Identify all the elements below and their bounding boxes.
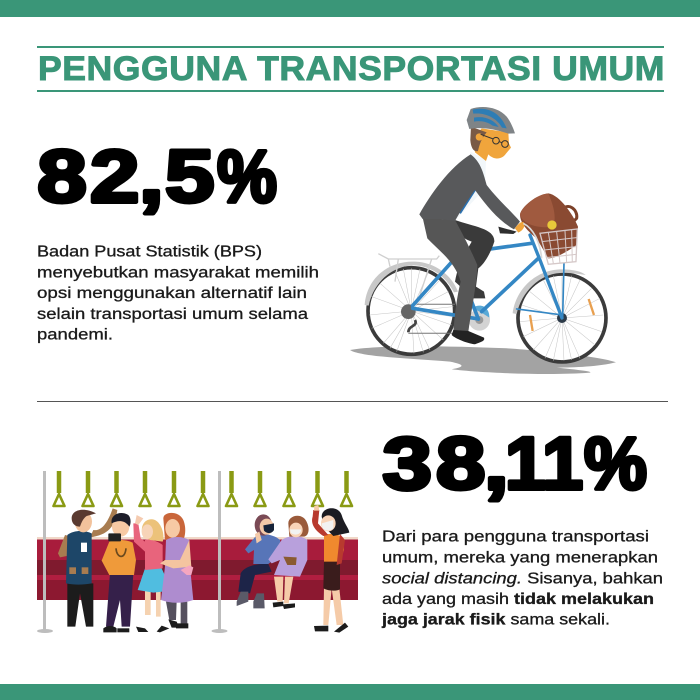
illustration: train passengers	[37, 471, 358, 633]
statistic: 82,5%: 82,5	[37, 136, 214, 218]
text block: BPS: Badan Pusat Statistik (BPS)	[37, 244, 262, 260]
statistic: 38,11%: 38,	[383, 423, 509, 505]
man with orange shirt	[102, 513, 136, 632]
shadow	[350, 346, 616, 374]
text block: social distancing: ada yang masih tidak melakukan	[382, 591, 654, 608]
poles	[37, 471, 228, 633]
text block: BPS: selain transportasi umum selama	[37, 306, 308, 323]
cyclist head	[470, 127, 511, 161]
text block: social distancing: Dari para pengguna transportasi	[382, 529, 649, 546]
text block: social distancing	[381, 529, 663, 628]
cyclist jacket	[419, 154, 520, 229]
statistic: 82,5%: %	[217, 135, 277, 218]
cyclist front leg and shoe	[423, 218, 484, 344]
text block: social distancing: umum, mereka yang menerapkan	[382, 550, 658, 566]
text block: social distancing: social distancing. Sisanya, bahkan	[382, 570, 663, 587]
title: PENGGUNA TRANSPORTASI UMUM	[38, 50, 665, 88]
rear rack	[378, 254, 439, 295]
text block: BPS: opsi menggunakan alternatif lain	[37, 285, 307, 302]
cyclist helmet	[467, 107, 515, 134]
seated woman	[268, 516, 309, 609]
statistic: 38,11%: 11	[505, 422, 583, 505]
text block: social distancing: jaga jarak fisik sama sekali.	[381, 612, 610, 628]
hanging straps	[54, 471, 352, 506]
front wheel	[513, 269, 606, 362]
text block: BPS	[37, 244, 319, 344]
train seats	[37, 537, 358, 600]
rear wheel	[365, 262, 458, 354]
woman in purple dress	[160, 513, 193, 628]
standing woman in orange	[312, 505, 349, 633]
basket	[540, 229, 577, 264]
bicycle frame	[413, 235, 564, 319]
cyclist shirt	[455, 152, 486, 219]
bag	[520, 193, 578, 258]
man with phone	[58, 508, 117, 627]
gears and crank	[401, 304, 490, 333]
bottom band	[0, 684, 700, 700]
hand and handlebar	[498, 222, 542, 258]
text block: BPS: pandemi.	[37, 327, 113, 344]
top band	[0, 0, 700, 17]
divider	[37, 401, 668, 402]
statistic: 38,11%	[383, 422, 647, 505]
seated man with mask	[237, 514, 282, 608]
statistic: 38,11%: %	[584, 422, 647, 505]
bicycle saddle	[429, 233, 457, 243]
girl in blue skirt	[133, 515, 172, 632]
text block: BPS: menyebutkan masyarakat memilih	[37, 264, 319, 281]
cyclist back leg	[455, 220, 494, 298]
illustration: cyclist	[350, 107, 616, 374]
